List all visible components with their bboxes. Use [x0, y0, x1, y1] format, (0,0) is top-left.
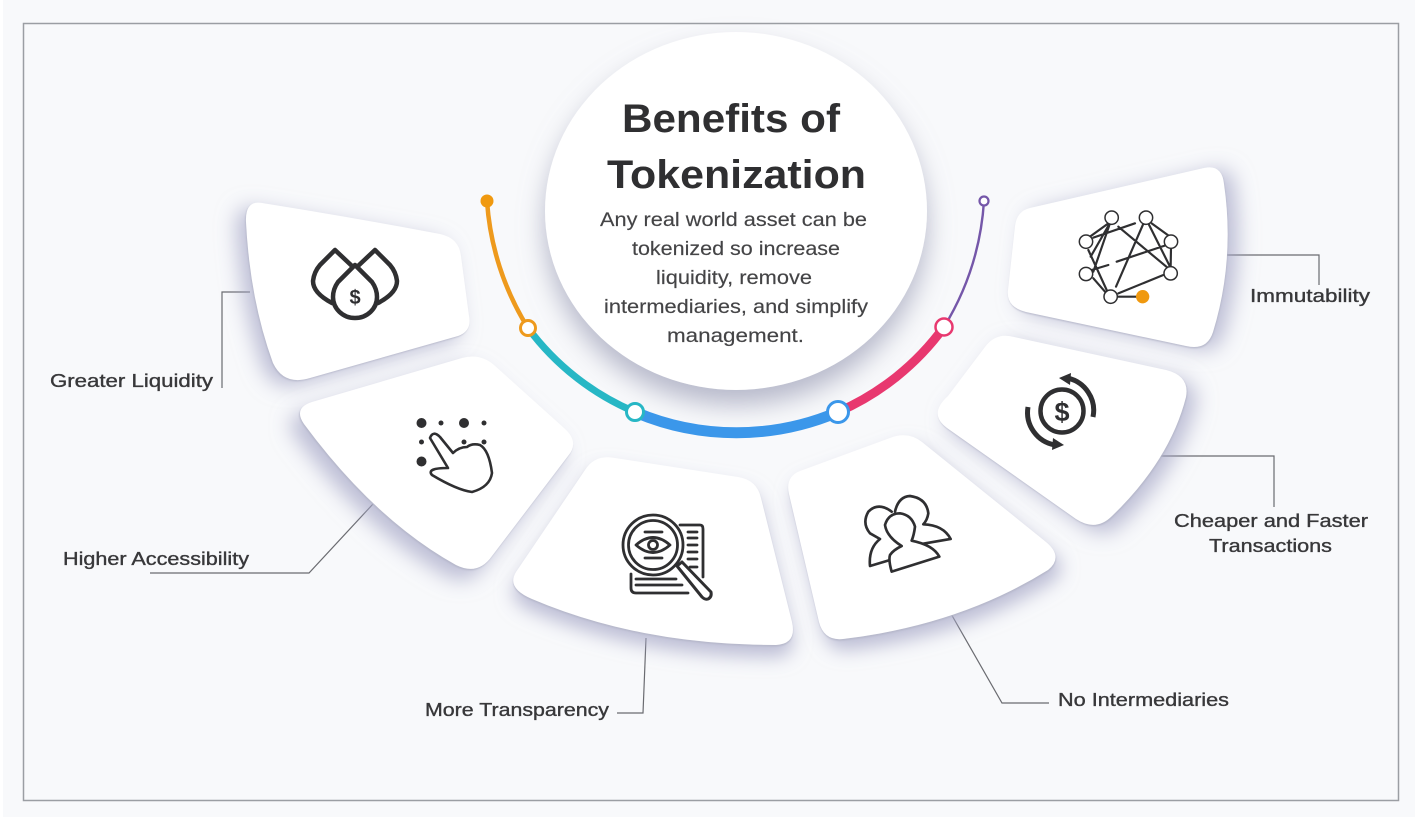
- panel: No Intermediaries: [788, 435, 1229, 710]
- orange segment: [487, 201, 528, 328]
- pink node: [936, 318, 952, 336]
- blue segment: [635, 412, 838, 433]
- panel: Immutability: [1008, 167, 1370, 347]
- description: [600, 209, 868, 347]
- panel: Higher Accessibility: [63, 357, 573, 573]
- icon: money drops: [313, 250, 397, 318]
- leader line: [1150, 456, 1274, 507]
- card: [788, 435, 1056, 639]
- teal segment: [528, 328, 635, 412]
- icon: node network: [1079, 211, 1178, 303]
- label: Immutability: [1250, 286, 1370, 306]
- leader line: [150, 504, 373, 573]
- title: Benefits of: [622, 97, 841, 141]
- label: No Intermediaries: [1058, 690, 1229, 710]
- icon: magnifier over document: [623, 515, 711, 599]
- icon: circular dollar exchange: $: [1054, 397, 1070, 427]
- title: [607, 97, 866, 197]
- panel: Greater Liquidity: [50, 203, 470, 391]
- card: [246, 203, 470, 380]
- description: intermediaries, and simplify: [604, 296, 868, 318]
- card: [938, 336, 1187, 525]
- label line 1: Cheaper and Faster: [1174, 511, 1368, 531]
- purple segment: [944, 201, 984, 327]
- purple end node: [980, 196, 988, 206]
- leader line: [222, 292, 250, 388]
- label: Higher Accessibility: [63, 549, 249, 569]
- leader line: [950, 612, 1049, 703]
- card: [300, 357, 573, 569]
- leader line: [617, 638, 646, 713]
- blue node: [828, 402, 848, 422]
- central circle: [545, 32, 927, 390]
- icon: group of people: [865, 496, 951, 572]
- icon: money drops: $: [349, 287, 361, 309]
- card: [1008, 167, 1228, 347]
- label line 2: Transactions: [1209, 536, 1332, 556]
- description: tokenized so increase: [632, 238, 840, 260]
- leader line: [1222, 255, 1319, 285]
- orange node: [520, 320, 536, 336]
- description: liquidity, remove: [656, 267, 812, 289]
- arc timeline: [480, 194, 988, 433]
- description: management.: [667, 325, 804, 347]
- pink segment: [838, 327, 944, 412]
- card: [513, 457, 793, 645]
- teal node: [626, 404, 644, 420]
- panel: More Transparency: [425, 457, 793, 720]
- label: More Transparency: [425, 700, 609, 720]
- orange end dot: [480, 194, 494, 208]
- icon: circular dollar exchange: [1028, 373, 1094, 450]
- title: Tokenization: [607, 153, 866, 197]
- label: Greater Liquidity: [50, 371, 213, 391]
- description: Any real world asset can be: [600, 209, 867, 231]
- circle shape: [545, 32, 927, 390]
- icon: hand touching dots: [416, 418, 492, 492]
- panel: Cheaper and Faster Transactions: [938, 336, 1368, 556]
